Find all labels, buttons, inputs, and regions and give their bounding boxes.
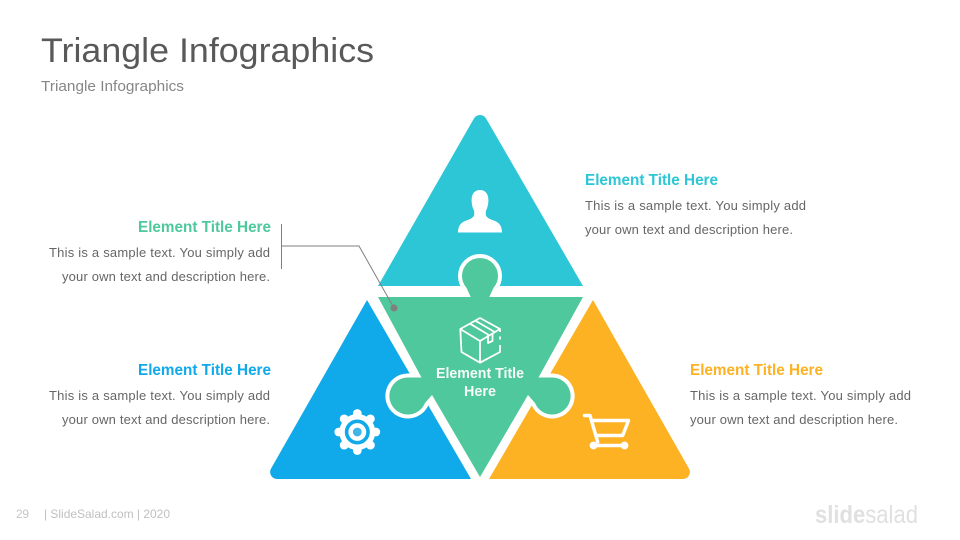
icon: gear [334,409,380,455]
panel: top teal triangle [378,115,583,286]
text block: orange element: This is a sample text. You simply add [690,388,911,403]
text block: blue element: Element Title Here [138,362,271,379]
triangle diagram [270,115,690,479]
text block: teal element: This is a sample text. You simply add [585,198,806,213]
centre label [436,366,524,400]
icon: person [458,190,502,232]
icon: box [460,318,500,363]
text block: orange element: your own text and description here. [690,412,898,427]
footer: page number: 29 [16,507,29,521]
text block: green element: This is a sample text. You simply add [49,245,270,260]
text block: teal element: Element Title Here [585,172,718,189]
text block: green element [49,219,271,284]
subtitle: Triangle Infographics [41,78,184,95]
callout connector [282,224,398,312]
text block: blue element [49,362,271,427]
text block: green element: your own text and description here. [62,269,270,284]
logo: slidesalad: slidesalad [815,501,918,529]
centre label: Element Title [436,366,524,382]
text block: green element: Element Title Here [138,219,271,236]
icon: shopping cart [584,416,628,448]
footer: source: | SlideSalad.com | 2020 [44,507,170,521]
panel: left blue triangle [270,300,471,479]
title: Triangle Infographics [41,32,374,70]
text block: orange element [690,362,911,427]
text block: teal element [585,172,806,237]
text block: teal element: your own text and description here. [585,222,793,237]
panel: centre green puzzle piece [378,258,583,477]
text block: blue element: This is a sample text. You simply add [49,388,270,403]
text block: blue element: your own text and description here. [62,412,270,427]
centre label: Here [464,384,496,400]
panel: right orange triangle [489,300,690,479]
text block: orange element: Element Title Here [690,362,823,379]
